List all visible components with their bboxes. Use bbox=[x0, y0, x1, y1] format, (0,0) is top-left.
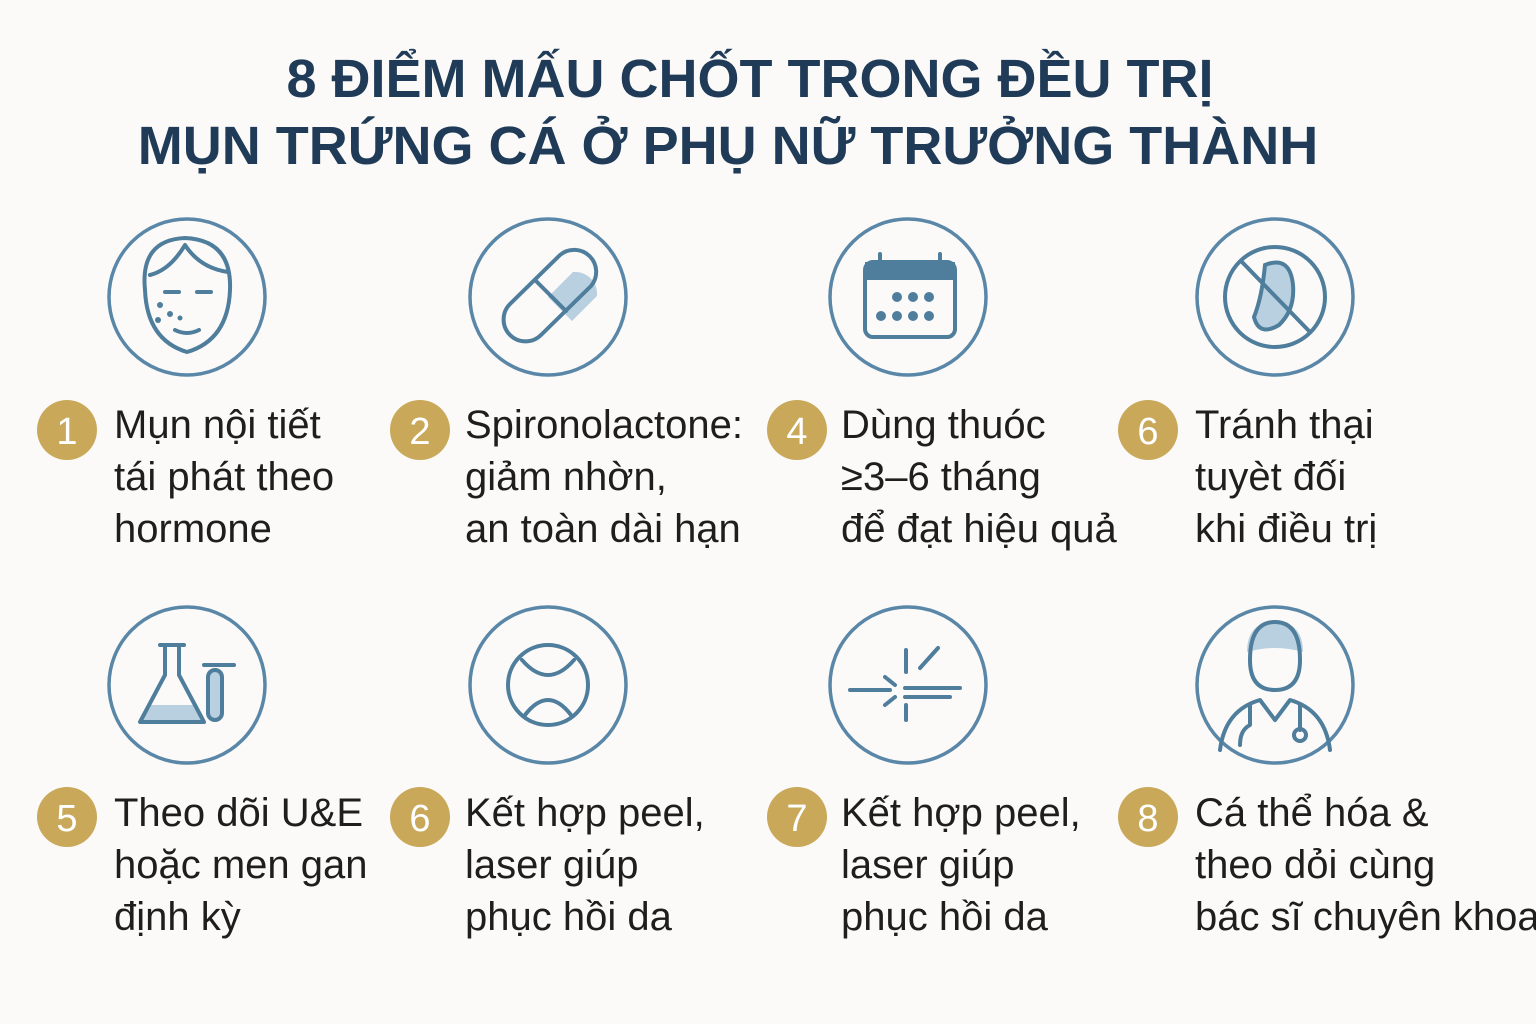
item 5: 5 bbox=[56, 798, 78, 840]
item 2: 2 bbox=[409, 411, 431, 453]
item 6 top bbox=[1118, 400, 1377, 551]
item 7: laser giúp bbox=[841, 843, 1014, 887]
icon: lab flask bbox=[109, 607, 265, 763]
item 1 bbox=[37, 400, 334, 551]
title: 8 ĐIỂM MẤU CHỐT TRONG ĐỀU TRỊ bbox=[286, 49, 1214, 109]
item 2 bbox=[390, 400, 743, 551]
item 6 top: khi điều trị bbox=[1195, 507, 1377, 551]
icon: face with acne bbox=[109, 219, 265, 375]
item 6 bottom bbox=[390, 787, 705, 939]
item 1: Mụn nội tiết bbox=[114, 403, 321, 447]
item 2: giảm nhờn, bbox=[465, 455, 667, 499]
item 4 bbox=[767, 400, 1118, 551]
item 7: Kết hợp peel, bbox=[841, 791, 1081, 835]
item 8: theo dỏi cùng bbox=[1195, 843, 1435, 887]
icon: doctor bbox=[1197, 607, 1353, 763]
item 8: Cá thể hóa & bbox=[1195, 791, 1429, 835]
item 4: ≥3–6 tháng bbox=[841, 455, 1041, 499]
item 6 top: 6 bbox=[1137, 411, 1159, 453]
item 1: 1 bbox=[56, 411, 78, 453]
item 7: 7 bbox=[786, 798, 808, 840]
item 1: hormone bbox=[114, 507, 272, 551]
item 6 bottom: laser giúp bbox=[465, 843, 638, 887]
item 2: an toàn dài hạn bbox=[465, 507, 741, 551]
icon: circle with X bbox=[470, 607, 626, 763]
item 6 top: Tránh thại bbox=[1195, 403, 1374, 447]
item 2: Spironolactone: bbox=[465, 403, 743, 447]
item 6 bottom: 6 bbox=[409, 798, 431, 840]
icon: no contraception bbox=[1197, 219, 1353, 375]
icon: pill bbox=[470, 219, 626, 375]
item 7: phục hồi da bbox=[841, 895, 1049, 939]
title bbox=[138, 49, 1318, 176]
item 4: để đạt hiệu quả bbox=[841, 507, 1118, 551]
title: MỤN TRỨNG CÁ Ở PHỤ NỮ TRƯỞNG THÀNH bbox=[138, 116, 1318, 176]
item 5: hoặc men gan bbox=[114, 843, 368, 887]
item 8: bác sĩ chuyên khoa bbox=[1195, 895, 1536, 939]
item 5: định kỳ bbox=[114, 895, 241, 939]
item 4: Dùng thuóc bbox=[841, 403, 1046, 447]
item 8 bbox=[1118, 787, 1536, 939]
item 4: 4 bbox=[786, 411, 808, 453]
item 5: Theo dõi U&E bbox=[114, 791, 363, 835]
item 6 top: tuyèt đối bbox=[1195, 455, 1346, 499]
item 1: tái phát theo bbox=[114, 455, 334, 499]
item 6 bottom: phục hồi da bbox=[465, 895, 673, 939]
icon: calendar bbox=[830, 219, 986, 375]
item 5 bbox=[37, 787, 368, 939]
item 7 bbox=[767, 787, 1081, 939]
icon: laser bbox=[830, 607, 986, 763]
item 8: 8 bbox=[1137, 798, 1159, 840]
item 6 bottom: Kết hợp peel, bbox=[465, 791, 705, 835]
